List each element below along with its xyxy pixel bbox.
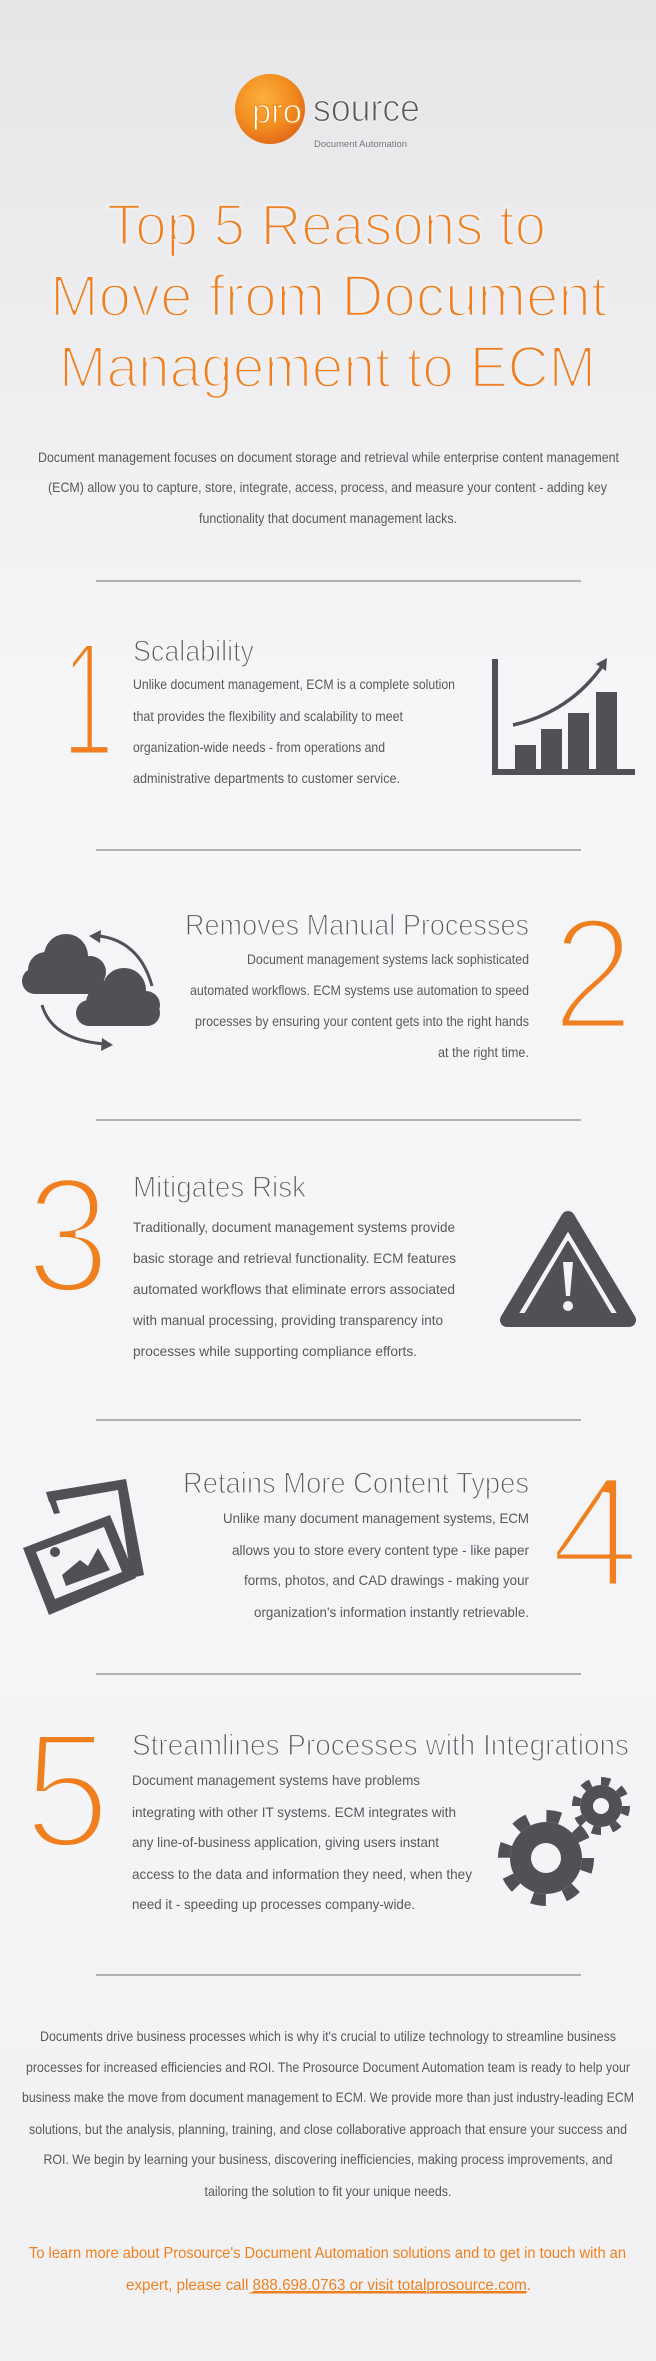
body text 5: access to the data and information they need, when they xyxy=(132,1866,472,1882)
body text 5: integrating with other IT systems. ECM integrates with xyxy=(132,1804,456,1820)
intro text: functionality that document management lacks. xyxy=(199,510,457,526)
body text 3: automated workflows that eliminate errors associated xyxy=(133,1281,455,1297)
body text 1: administrative departments to customer service. xyxy=(133,770,400,786)
body text 5: any line-of-business application, giving users instant xyxy=(132,1834,439,1850)
logo: source xyxy=(313,88,420,130)
title: Move from Document xyxy=(50,264,607,329)
body text 1 xyxy=(133,676,455,786)
body text 5: need it - speeding up processes company-wide. xyxy=(132,1896,415,1912)
icon: warning sign xyxy=(507,1218,629,1320)
heading: Retains More Content Types: Retains More Content Types xyxy=(183,1467,529,1500)
body text 1: organization-wide needs - from operations and xyxy=(133,739,385,755)
numeral 2: 2 xyxy=(552,884,634,1063)
numeral 1: 1 xyxy=(62,607,114,791)
section 5: streamlines processes xyxy=(24,1698,629,1912)
section 1: scalability xyxy=(62,607,635,791)
logo xyxy=(235,74,420,149)
body text 3: processes while supporting compliance efforts. xyxy=(133,1343,417,1359)
body text 3: Traditionally, document management systems provide xyxy=(133,1219,455,1235)
heading: Scalability: Scalability xyxy=(133,635,254,668)
numeral 4: 4 xyxy=(550,1442,640,1621)
body text 4: allows you to store every content type - like paper xyxy=(232,1542,529,1558)
heading: Mitigates Risk: Mitigates Risk xyxy=(133,1171,307,1204)
body text 2: processes by ensuring your content gets into the right hands xyxy=(195,1013,529,1029)
call to action xyxy=(29,2245,626,2294)
body text 2 xyxy=(190,951,529,1060)
numeral 5: 5 xyxy=(24,1698,110,1882)
icon: growth chart xyxy=(492,658,635,775)
title xyxy=(50,193,607,400)
call to action: expert, please call 888.698.0763 or visit totalprosource.com. xyxy=(126,2277,531,2294)
body text 4: Unlike many document management systems, ECM xyxy=(223,1510,529,1526)
body text 4: forms, photos, and CAD drawings - making your xyxy=(244,1572,529,1588)
closing paragraph xyxy=(22,2028,634,2199)
body text 2: automated workflows. ECM systems use automation to speed xyxy=(190,982,529,998)
logo: pro xyxy=(252,93,302,131)
body text 2: Document management systems lack sophisticated xyxy=(247,951,529,967)
intro text xyxy=(38,449,619,526)
body text 5 xyxy=(132,1772,472,1912)
icon: clouds with sync arrows xyxy=(22,930,160,1051)
section 3: mitigates risk xyxy=(26,1143,629,1359)
title: Management to ECM xyxy=(59,335,596,400)
body text 2: at the right time. xyxy=(438,1044,529,1060)
body text 1: that provides the flexibility and scalability to meet xyxy=(133,708,403,724)
closing paragraph: tailoring the solution to fit your unique needs. xyxy=(204,2183,452,2199)
numeral 3: 3 xyxy=(26,1143,110,1327)
body text 1: Unlike document management, ECM is a complete solution xyxy=(133,676,455,692)
icon: gears xyxy=(504,1781,626,1900)
heading: Streamlines Processes with Integrations: Streamlines Processes with Integrations xyxy=(132,1729,629,1762)
icon: photos xyxy=(23,1479,144,1615)
section 2: removes manual processes xyxy=(22,884,634,1063)
section 4: retains more content types xyxy=(23,1442,640,1621)
body text 3 xyxy=(132,1219,456,1359)
body text 3: with manual processing, providing transparency into xyxy=(132,1312,443,1328)
body text 4: organization's information instantly retrievable. xyxy=(254,1604,529,1620)
heading: Removes Manual Processes: Removes Manual Processes xyxy=(185,909,529,942)
logo: Document Automation xyxy=(314,139,407,149)
title: Top 5 Reasons to xyxy=(107,193,546,258)
body text 3: basic storage and retrieval functionality. ECM features xyxy=(133,1250,456,1266)
body text 4 xyxy=(223,1510,529,1620)
body text 5: Document management systems have problems xyxy=(132,1772,420,1788)
